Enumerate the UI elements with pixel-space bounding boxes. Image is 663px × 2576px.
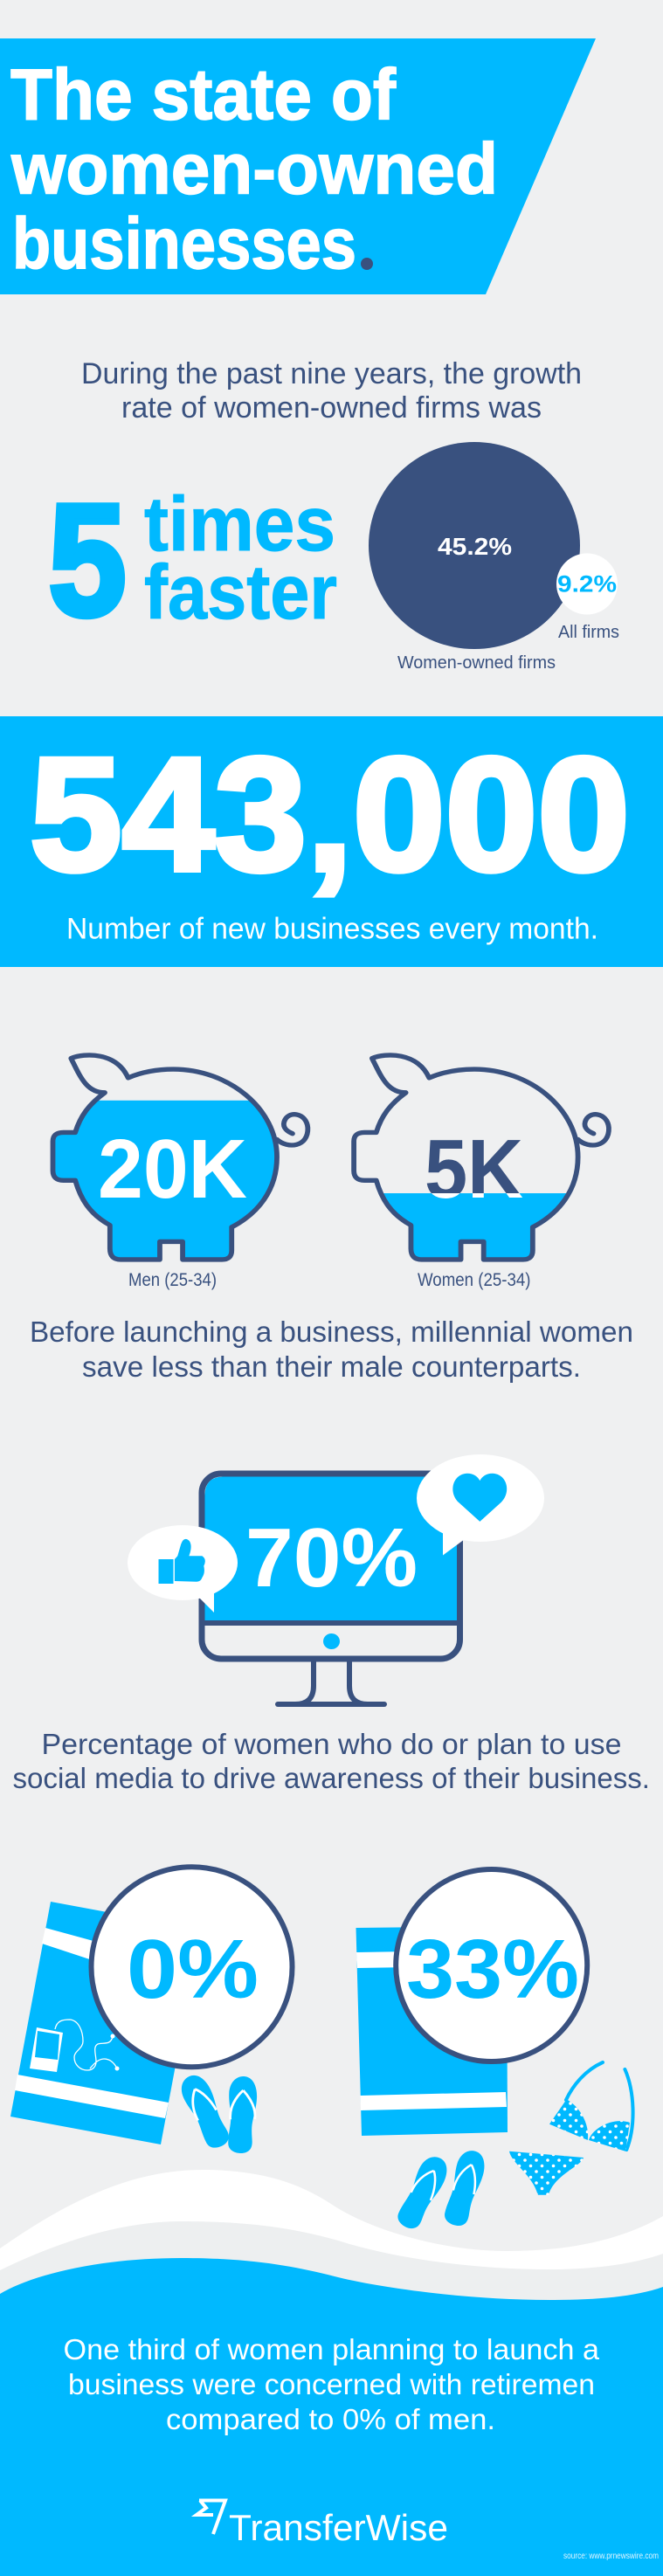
social media caption (12, 1728, 650, 1794)
logo: TransferWise: TransferWise (229, 2507, 448, 2548)
icon: heart bubble (417, 1454, 544, 1555)
intro text: During the past nine years, the growth (81, 357, 582, 390)
towel (356, 1926, 508, 2136)
piggy bank: women: 5K (425, 1122, 523, 1216)
retirement caption: One third of women planning to launch a (63, 2333, 600, 2365)
panel: growth rate (49, 357, 619, 673)
bubble: all firms: All firms (558, 623, 619, 642)
big number: 543,000 (30, 725, 630, 905)
bubble: all firms (556, 554, 619, 642)
5 times faster: faster (144, 549, 337, 635)
piggy bank: men (42, 1055, 307, 1290)
panel: social media (12, 1454, 650, 1794)
piggy bank: men: Men (25-34) (128, 1270, 217, 1290)
title: businesses (12, 203, 356, 284)
piggy bank: women: Women (25-34) (418, 1270, 531, 1290)
70 percent: 70% (245, 1511, 418, 1605)
retirement caption (63, 2333, 600, 2435)
icon: music player (30, 2020, 119, 2072)
title (10, 54, 498, 284)
footer waves (0, 2170, 663, 2576)
icon: flip-flops (393, 2147, 489, 2233)
icon: thumbs up bubble (128, 1525, 238, 1613)
bubble: women-owned firms: Women-owned firms (397, 653, 556, 673)
5 times faster (49, 471, 337, 649)
panel: retirement women (356, 1869, 633, 2233)
retirement caption: compared to 0% of men. (166, 2403, 495, 2435)
towel (10, 1902, 201, 2144)
piggy bank: women (343, 1055, 609, 1290)
caption: Number of new businesses every month. (66, 912, 598, 945)
5 times faster: 5 (49, 471, 126, 649)
retirement caption: business were concerned with retiremen (68, 2368, 595, 2400)
bubble: all firms: 9.2% (557, 571, 617, 597)
savings caption: Before launching a business, millennial women (30, 1316, 633, 1348)
circle: 0 percent: 0% (127, 1923, 259, 2016)
banner (0, 38, 596, 294)
social media caption: Percentage of women who do or plan to use (42, 1728, 621, 1760)
panel: savings (30, 1055, 633, 1383)
social media caption: social media to drive awareness of their business. (12, 1762, 650, 1794)
circle: 0 percent (91, 1867, 292, 2067)
panel: header (0, 38, 596, 294)
piggy bank: men: 20K (98, 1122, 247, 1216)
monitor (202, 1474, 459, 1704)
panel: retirement men (10, 1867, 292, 2154)
savings caption (30, 1316, 633, 1383)
5 times faster: times (144, 480, 335, 567)
icon: bikini (509, 2062, 633, 2195)
title: women-owned (10, 128, 498, 210)
circle: 33 percent: 33% (406, 1923, 579, 2016)
title: The state of (10, 54, 396, 135)
bubble: women-owned firms (369, 442, 580, 673)
piggy bank: women: 5K (425, 1122, 523, 1216)
intro text (81, 357, 582, 425)
circle: 33 percent (396, 1869, 587, 2061)
bubble: women-owned firms: 45.2% (438, 533, 512, 560)
intro text: rate of women-owned firms was (121, 391, 542, 425)
icon: flip-flops (176, 2070, 258, 2154)
panel: new businesses (0, 716, 663, 967)
savings caption: save less than their male counterparts. (82, 1350, 581, 1383)
